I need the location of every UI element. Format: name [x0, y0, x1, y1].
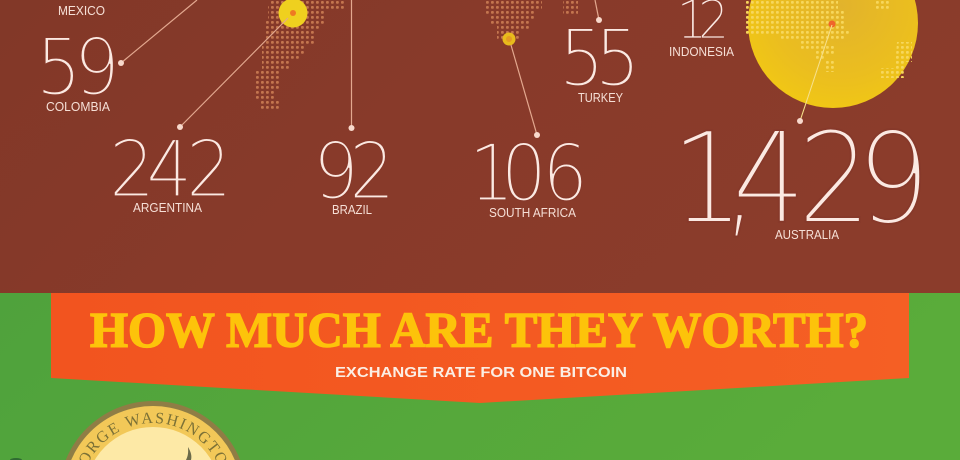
George Washington coin seal [66, 401, 240, 460]
subheading: exchange rate: EXCHANGE RATE FOR ONE BITCOIN [335, 365, 627, 381]
number: Argentina 242: 242 [109, 123, 232, 215]
label: Australia: AUSTRALIA [775, 228, 840, 242]
dotted map: Africa [486, 0, 542, 41]
number: Brazil 92: 92 [313, 125, 395, 217]
callout: Indonesia [669, 0, 735, 59]
label: Turkey: TURKEY [578, 91, 624, 105]
label: Mexico: MEXICO [58, 4, 105, 18]
green lower panel [0, 293, 960, 460]
number: Turkey 55: 55 [559, 12, 640, 104]
label: South Africa: SOUTH AFRICA [489, 206, 577, 220]
brown map background panel [0, 0, 960, 293]
orange title banner [51, 293, 909, 403]
leader line: Brazil [348, 0, 354, 131]
number: Australia 1,429: 1,429 [671, 105, 930, 252]
leader line: Australia [797, 25, 832, 124]
number: South Africa 106: 106 [469, 127, 588, 219]
label: Argentina: ARGENTINA [133, 201, 203, 215]
small dark shape at lower left [10, 458, 22, 460]
callout: Australia [671, 25, 930, 252]
callout: South Africa [469, 45, 588, 220]
number: Colombia 59: 59 [36, 21, 120, 113]
heading: How much are they worth?: HOW MUCH ARE THEY WORTH? [90, 302, 868, 358]
callout: Mexico / Colombia [36, 0, 197, 114]
Argentina map marker [278, 0, 308, 28]
leader line: Turkey [595, 0, 602, 23]
callout: Argentina [109, 18, 288, 215]
label: Brazil: BRAZIL [332, 203, 372, 217]
callout: Turkey [559, 0, 640, 105]
dotted map: Middle East fragment [563, 0, 578, 16]
label: Indonesia: INDONESIA [669, 45, 735, 59]
label: Colombia: COLOMBIA [46, 100, 111, 114]
Australia highlight circle with dotted map [745, 0, 918, 108]
leader line: Colombia [118, 0, 197, 66]
callout: Brazil [313, 0, 395, 217]
dotted map: Americas [255, 0, 346, 110]
South Africa map marker [502, 32, 516, 46]
portrait hair tip [186, 447, 191, 460]
leader line: South Africa [511, 45, 540, 138]
leader line: Argentina [177, 18, 288, 130]
